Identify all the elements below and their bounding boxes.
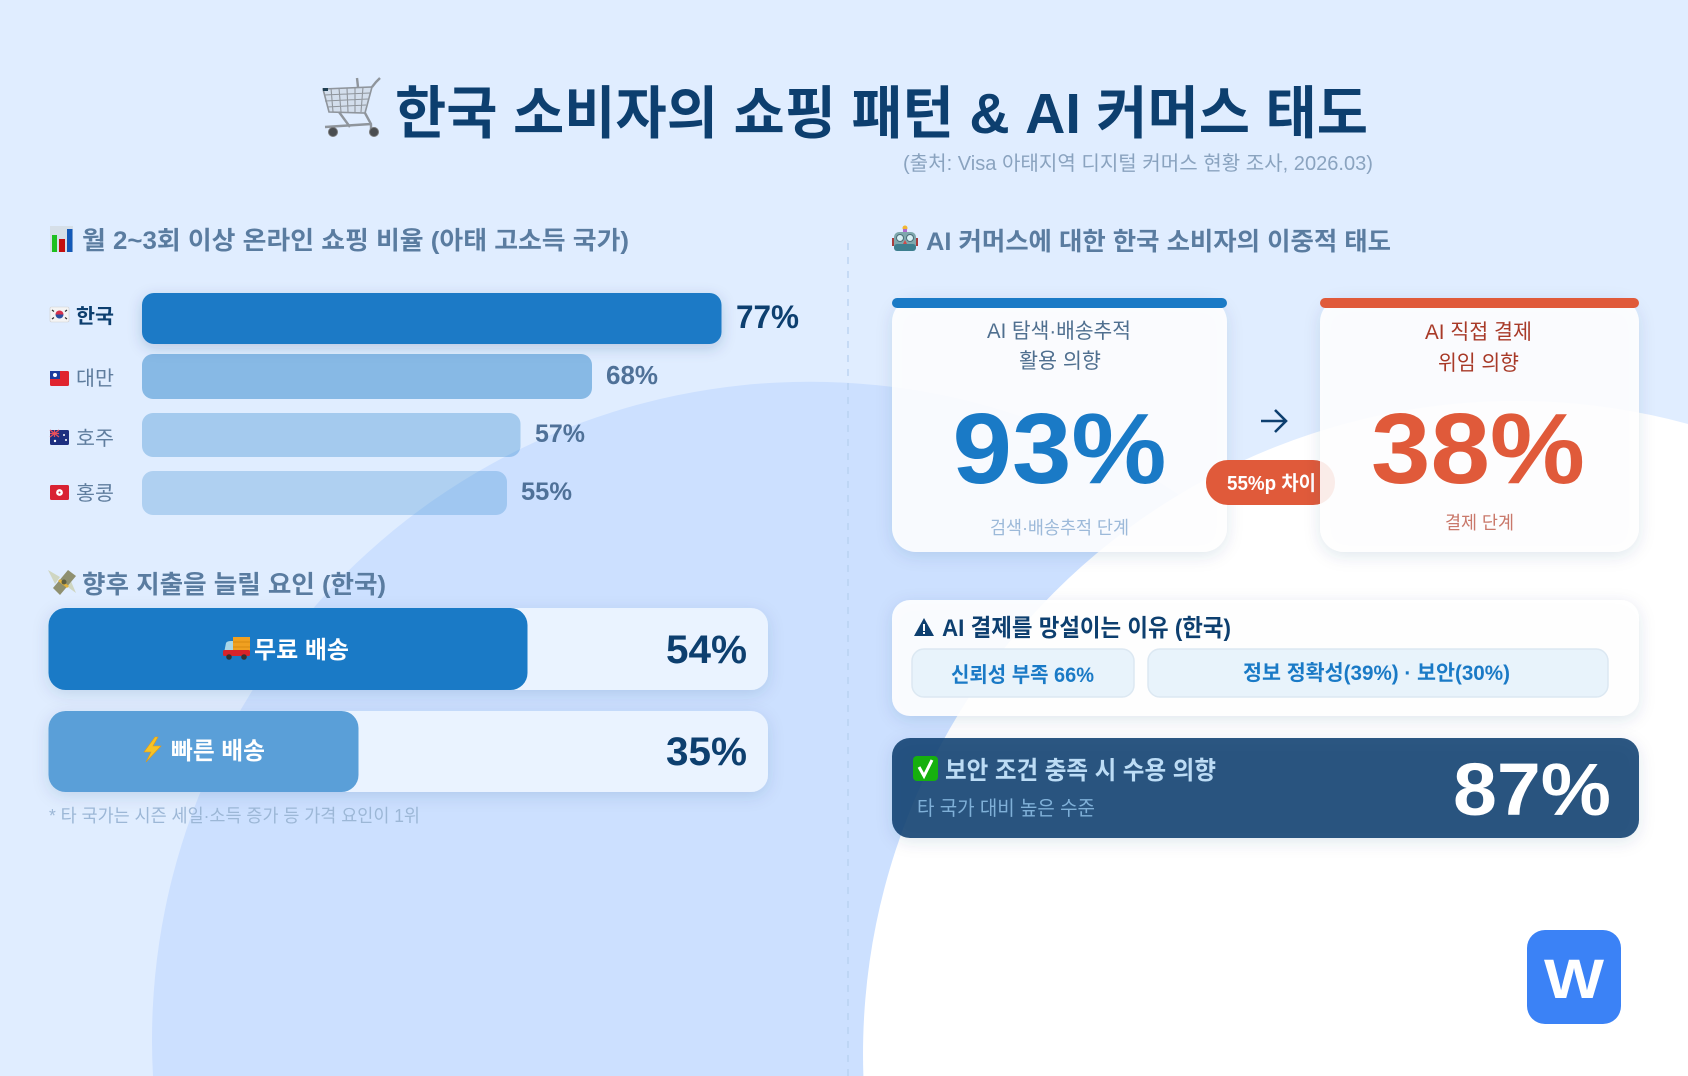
panel: acceptance if secure: 보안 조건 충족 시 수용 의향: [945, 757, 1216, 785]
panel: reasons for hesitation: AI 결제를 망설이는 이유 (한국): [942, 615, 1231, 642]
chip: accuracy and security: 정보 정확성(39%) · 보안(30%): [1243, 662, 1510, 685]
logo: W: W: [1544, 947, 1604, 1010]
bar row: Korea: [50, 293, 799, 344]
bar: fast shipping: [48, 711, 768, 792]
stat card: 38%: 위임 의향: [1438, 352, 1519, 375]
bar: fast shipping: 빠른 배송: [171, 738, 265, 765]
stat card: 93%: [892, 298, 1227, 552]
stat card: 93%: 활용 의향: [1019, 350, 1101, 373]
bar row: Australia: [50, 413, 585, 457]
stat card: 93%: AI 탐색·배송추적: [987, 320, 1131, 343]
bar row: Taiwan: [50, 354, 658, 399]
bar row: Hong Kong: 홍콩: [76, 482, 114, 505]
panel: reasons for hesitation: [892, 600, 1639, 716]
bar: free shipping: 무료 배송: [254, 637, 349, 664]
icon: delivery truck: [223, 637, 250, 660]
icon: warning: [914, 618, 934, 636]
icon: Taiwan flag: [50, 371, 69, 386]
bar row: Hong Kong: [50, 471, 572, 515]
heading: online shopping: 월 2~3회 이상 온라인 쇼핑 비율 (아태 고소득 국가): [82, 227, 629, 255]
icon: robot: [892, 226, 918, 251]
panel: spending factors: [48, 570, 768, 826]
bar row: Korea: 한국: [76, 305, 114, 328]
panel: online shopping frequency: [50, 226, 799, 515]
chip: accuracy and security: [1148, 649, 1608, 697]
chip: trust: [912, 649, 1134, 697]
icon: Hong Kong flag: [50, 485, 69, 500]
bar row: Australia: 호주: [76, 428, 114, 450]
bar row: Taiwan: 68%: [606, 360, 658, 390]
icon: lightning bolt: [144, 737, 161, 762]
stat card: 38%: 결제 단계: [1445, 513, 1514, 533]
icon: Korean flag: [50, 307, 69, 322]
icon: shopping cart: [323, 78, 380, 136]
bar row: Taiwan: 대만: [76, 367, 114, 390]
title: 한국 소비자의 쇼핑 패턴 & AI 커머스 태도: [395, 82, 1368, 146]
stat card: 38%: AI 직접 결제: [1425, 321, 1532, 344]
bar: fast shipping: 35%: [666, 730, 747, 774]
heading: AI commerce attitude: AI 커머스에 대한 한국 소비자의 이중적 태도: [926, 228, 1391, 256]
bar row: Hong Kong: 55%: [521, 478, 572, 506]
chip: trust: 신뢰성 부족 66%: [951, 664, 1094, 687]
icon: Australian flag: [50, 430, 69, 445]
stat card: 38%: 38%: [1371, 393, 1585, 505]
arrow: [1261, 410, 1286, 432]
panel: dual attitude: [892, 226, 1639, 838]
icon: check mark: [913, 756, 938, 781]
bar row: Korea: 77%: [736, 299, 799, 335]
bar row: Australia: 57%: [535, 420, 585, 448]
bar: free shipping: 54%: [666, 628, 747, 672]
heading: spending factors: 향후 지출을 늘릴 요인 (한국): [82, 571, 386, 599]
footnote: * 타 국가는 시즌 세일·소득 증가 등 가격 요인이 1위: [49, 806, 420, 826]
panel: acceptance if secure: [892, 738, 1639, 838]
logo: W: [1527, 930, 1621, 1024]
stat card: 93%: 검색·배송추적 단계: [990, 518, 1129, 538]
panel: acceptance if secure: 타 국가 대비 높은 수준: [917, 797, 1095, 820]
panel: acceptance if secure: 87%: [1453, 748, 1611, 831]
bar: free shipping: [48, 608, 768, 690]
stat card: 93%: 93%: [952, 393, 1166, 505]
badge: 55%p difference: [1206, 460, 1335, 505]
stat card: 38%: [1320, 298, 1639, 552]
icon: money with wings: [48, 570, 76, 595]
badge: 55%p difference: 55%p 차이: [1227, 472, 1316, 495]
source subtitle: (출처: Visa 아태지역 디지털 커머스 현황 조사, 2026.03): [903, 152, 1373, 175]
icon: bar chart: [50, 226, 73, 252]
